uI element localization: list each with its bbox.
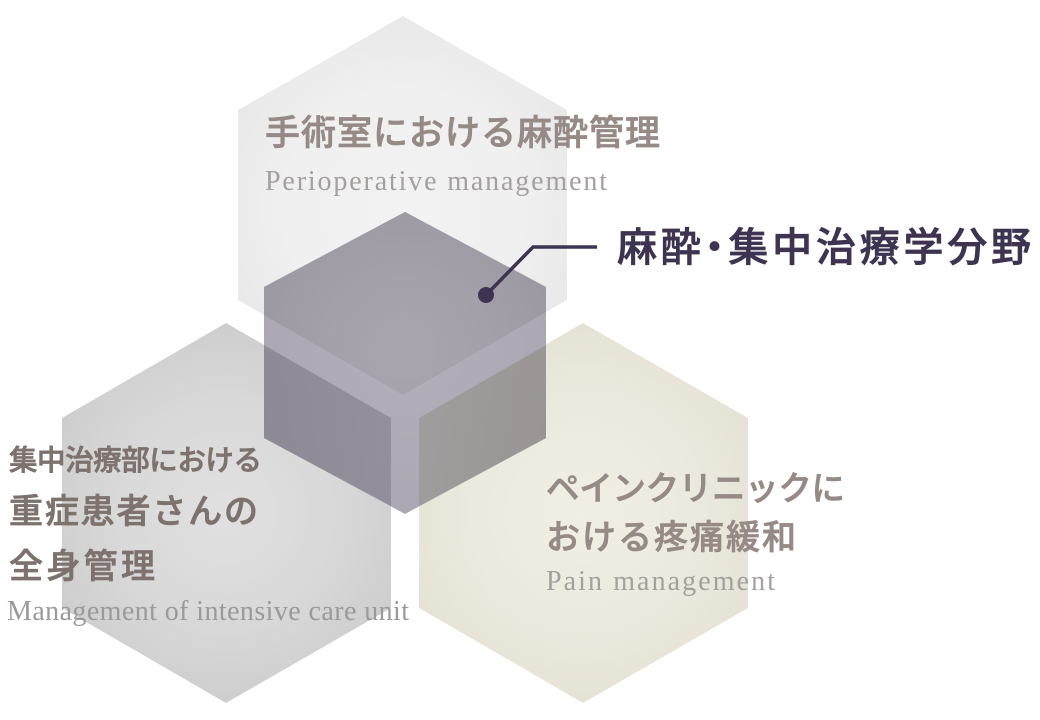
callout leader line [478,247,597,303]
hexagon: pain management [419,323,748,703]
hexagon: perioperative [238,16,567,395]
label: perioperative [265,114,660,197]
heading: intensive care line 3: 全身管理 [9,548,155,586]
heading: intensive care line 2: 重症患者さんの [9,493,258,531]
label: intensive care [7,445,409,627]
overlap with top hexagon [264,212,546,395]
heading: intensive care line 1: 集中治療部における [9,445,262,477]
text: perioperative en: Perioperative management [265,166,607,197]
overlap with right hexagon [419,345,546,506]
heading: pain line 2: おける疼痛緩和 [546,519,796,557]
callout dot [478,287,494,303]
center hexagon: overlap [264,212,546,514]
center base [264,212,546,514]
title: 麻酔・集中治療学分野 [617,226,1031,270]
text: intensive care en: Management of intensive care unit [7,596,409,627]
heading: pain line 1: ペインクリニックに [546,471,845,508]
hexagon: intensive care [62,323,391,703]
heading: perioperative jp: 手術室における麻酔管理 [265,114,660,153]
label: pain management [546,471,845,597]
text: pain en: Pain management [546,566,775,597]
overlap with left hexagon [264,345,391,506]
